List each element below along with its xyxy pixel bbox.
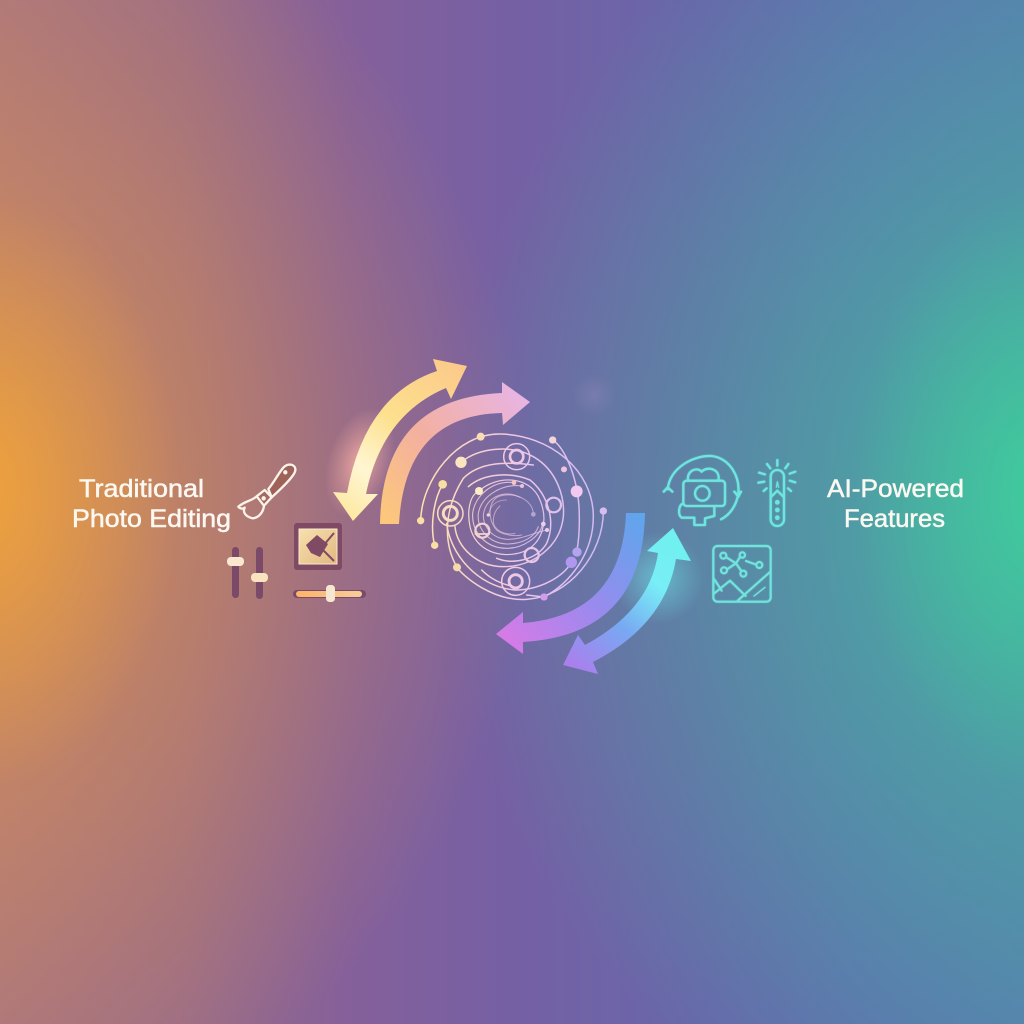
icon: framed picture: [294, 523, 342, 570]
icon: paintbrush: [238, 465, 295, 518]
label: AI-Powered Features: AI-Powered: [827, 475, 964, 503]
spiral rings: [438, 444, 561, 595]
icon: AI brain camera: [664, 456, 741, 525]
glow behind yellow arrow: [312, 399, 408, 525]
arrow: cyan to violet double-headed arc: [563, 528, 691, 674]
label: Traditional Photo Editing: Traditional: [79, 475, 204, 503]
label: AI-Powered Features: [827, 475, 964, 533]
label: AI-Powered Features: Features: [844, 505, 945, 533]
arrow: yellow double-headed arc: [333, 359, 467, 521]
icon: magic wand: [758, 460, 795, 526]
label: Traditional Photo Editing: [72, 475, 231, 533]
background glow: faint spot: [572, 373, 616, 417]
icon: vertical sliders: [227, 547, 268, 599]
icon: horizontal slider: [293, 585, 366, 602]
arrow: peach to pink arc: [380, 382, 530, 524]
arrow: blue to violet arc: [496, 513, 645, 654]
spiral nodes: [417, 433, 607, 601]
central spiral network: [417, 433, 607, 601]
glow behind cyan arrow: [612, 532, 704, 624]
label: Traditional Photo Editing: Photo Editing: [72, 505, 231, 533]
icon: image with node graph: [713, 546, 771, 602]
